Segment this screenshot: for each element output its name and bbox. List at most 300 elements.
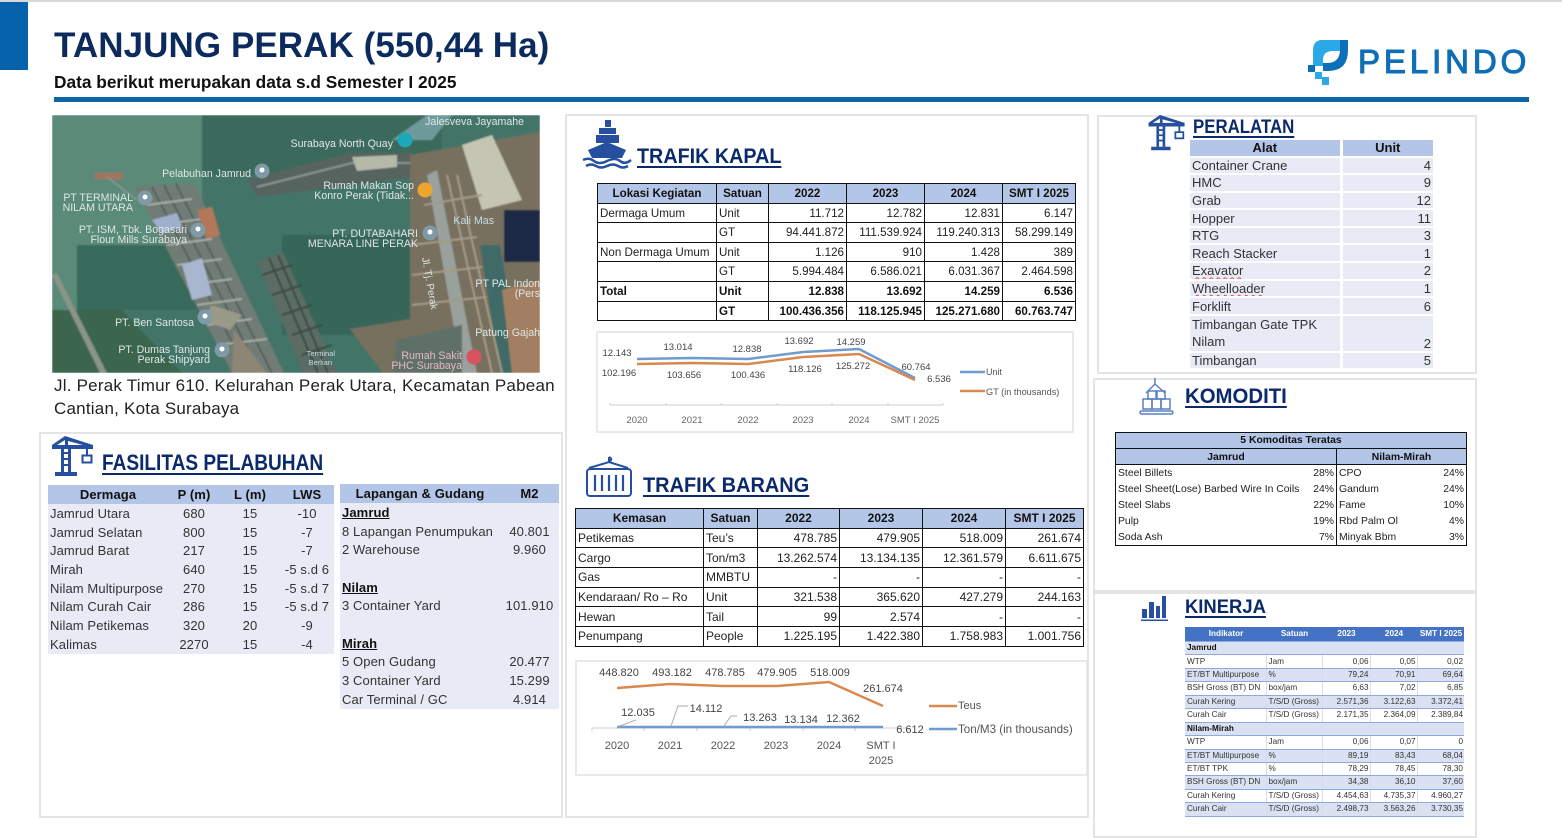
chart: trafik kapal line chart: 102.196 (602, 368, 636, 379)
table: komoditi: 24% (1443, 468, 1464, 479)
table: kinerja: % (1268, 764, 1276, 773)
chart: trafik barang line chart: 478.785 (705, 667, 745, 679)
table: trafik kapal: Lokasi Kegiatan (613, 187, 701, 200)
chart: trafik kapal line chart: SMT I 2025 (891, 415, 939, 426)
table: kinerja: 0,07 (1400, 737, 1416, 746)
table: lapangan dan gudang: Car Terminal / GC (342, 692, 447, 707)
table: lapangan dan gudang: 9.960 (513, 542, 546, 557)
table: kinerja: 2.389,84 (1431, 710, 1463, 719)
chart: trafik kapal line chart: 2021 (681, 415, 703, 426)
table: komoditi: Rbd Palm Ol (1339, 516, 1398, 527)
blue corner tab (0, 2, 28, 70)
table: komoditi: 22% (1313, 500, 1334, 511)
table: kinerja: 89,19 (1348, 751, 1368, 760)
header divider (54, 97, 1529, 102)
table: trafik barang: Satuan (710, 511, 750, 525)
table: trafik kapal: Non Dermaga Umum (600, 246, 710, 259)
table: peralatan: Container Crane (1192, 158, 1287, 173)
table: trafik kapal: 12.838 (809, 285, 844, 298)
table: lapangan dan gudang: Nilam (342, 580, 378, 595)
table: dermaga: 640 (183, 562, 205, 577)
table: peralatan: 1 (1424, 246, 1431, 261)
table: kinerja: Satuan (1281, 629, 1308, 638)
table: trafik kapal: 14.259 (965, 285, 1000, 298)
table: peralatan: 12 (1417, 193, 1431, 208)
chart: trafik barang line chart: 13.134 (784, 714, 818, 726)
table: lapangan dan gudang: 3 Container Yard (342, 598, 441, 613)
table: trafik barang: MMBTU (706, 570, 750, 584)
table: dermaga: 286 (183, 599, 205, 614)
table: kinerja: 0,06 (1353, 657, 1368, 666)
table: kinerja: T/S/D (Gross) (1268, 710, 1319, 719)
table: trafik kapal: Dermaga Umum (600, 207, 685, 220)
address: Jl. Perak Timur 610. Kelurahan Perak Utara, Kecamatan Pabean (54, 376, 555, 395)
table: dermaga: Dermaga (80, 487, 136, 502)
table: trafik barang: 12.361.579 (943, 551, 1003, 565)
table: kinerja: ET/BT TPK (1187, 764, 1228, 773)
address (54, 376, 555, 418)
map labels: Rumah Sakit (401, 350, 462, 362)
panel: fasilitas pelabuhan (39, 432, 563, 818)
table: trafik barang: 321.538 (794, 590, 837, 604)
table: dermaga: 20 (243, 618, 257, 633)
table: kinerja: T/S/D (Gross) (1268, 804, 1319, 813)
table: kinerja: 78,30 (1442, 764, 1463, 773)
table: trafik barang: 427.279 (960, 590, 1003, 604)
table: kinerja: Jamrud (1187, 643, 1217, 652)
icon: crane fasilitas (52, 436, 93, 476)
table: dermaga: Nilam Curah Cair (50, 599, 151, 614)
table: lapangan dan gudang: 101.910 (506, 598, 553, 613)
table: trafik kapal: 910 (903, 246, 922, 259)
table: dermaga: Mirah (50, 562, 83, 577)
table: trafik barang: Cargo (578, 551, 611, 565)
chart: trafik kapal line chart: 2023 (792, 415, 814, 426)
heading: komoditi: KOMODITI (1185, 385, 1287, 408)
chart: trafik kapal line chart: 12.143 (602, 348, 632, 359)
table: komoditi: 24% (1313, 484, 1334, 495)
table: komoditi: Nilam-Mirah (1372, 452, 1431, 463)
table: trafik barang: Kemasan (613, 511, 666, 525)
chart: trafik barang line chart: 261.674 (863, 683, 903, 695)
table: dermaga (48, 485, 334, 654)
table: komoditi (1115, 432, 1467, 546)
table: dermaga: 15 (243, 506, 257, 521)
heading: trafik barang: TRAFIK BARANG (643, 474, 809, 497)
panel: trafik (565, 114, 1089, 818)
chart: trafik barang line chart: 2022 (711, 740, 735, 752)
table: trafik kapal: 100.436.356 (780, 305, 844, 318)
table: kinerja: 6,85 (1447, 683, 1463, 692)
table: kinerja: Jam (1268, 737, 1284, 746)
table: trafik barang: 1.001.756 (1028, 629, 1081, 643)
map labels: PT PAL Indon (475, 278, 540, 290)
table: peralatan: Exavator (1192, 263, 1243, 278)
map labels: Kali Mas (453, 215, 494, 227)
table: trafik kapal: GT (719, 305, 735, 318)
table: trafik kapal: GT (719, 226, 735, 239)
table: kinerja: 34,38 (1348, 777, 1368, 786)
panel: komoditi (1093, 378, 1477, 592)
table: kinerja: 0,05 (1400, 657, 1416, 666)
chart: trafik kapal line chart: 13.014 (663, 342, 693, 353)
table: dermaga: 217 (183, 543, 205, 558)
table: peralatan: RTG (1192, 228, 1219, 243)
table: trafik barang: Teu’s (706, 531, 734, 545)
chart: trafik kapal line chart: 12.838 (732, 344, 762, 355)
table: lapangan dan gudang: 20.477 (509, 654, 550, 669)
table: trafik barang: 2023 (868, 511, 894, 525)
table: trafik barang: 478.785 (794, 531, 837, 545)
map labels: PT. Ben Santosa (115, 317, 194, 329)
table: komoditi: Gandum (1339, 484, 1379, 495)
table: trafik kapal: 119.240.313 (936, 226, 1000, 239)
chart: trafik kapal line chart: 2020 (626, 415, 648, 426)
panel: kinerja (1093, 592, 1477, 838)
table: dermaga: P (m) (178, 487, 210, 502)
chart: trafik barang line chart: 2025 (869, 755, 893, 767)
table: trafik kapal: 2024 (951, 187, 976, 200)
table: kinerja: 3.563,26 (1384, 804, 1416, 813)
table: trafik barang: Gas (578, 570, 600, 584)
heading: kinerja: KINERJA (1185, 597, 1266, 618)
table: trafik kapal: 2022 (795, 187, 820, 200)
table: kinerja: 83,43 (1395, 751, 1416, 760)
chart: trafik kapal line chart: 2022 (737, 415, 759, 426)
table: dermaga: Nilam Petikemas (50, 618, 149, 633)
table: lapangan dan gudang: 15.299 (509, 673, 550, 688)
table: komoditi: CPO (1339, 468, 1362, 479)
map labels: Pelabuhan Jamrud (162, 168, 251, 180)
top grey rule (0, 0, 1562, 2)
table: kinerja: BSH Gross (BT) DN (1187, 683, 1260, 692)
map labels: Jalesveva Jayamahe (425, 116, 524, 128)
table: trafik kapal: SMT I 2025 (1009, 187, 1069, 200)
table: dermaga: 15 (243, 599, 257, 614)
table: dermaga: 15 (243, 637, 257, 652)
map labels: Jl. Tj. Perak (419, 257, 439, 311)
table: peralatan (1190, 140, 1433, 368)
table: komoditi: Pulp (1118, 516, 1139, 527)
heading: peralatan: PERALATAN (1193, 117, 1294, 138)
map labels: Patung Gajah (475, 327, 540, 339)
table: trafik barang: 2.574 (890, 610, 920, 624)
table: komoditi: Steel Slabs (1118, 500, 1171, 511)
table: trafik barang: 518.009 (960, 531, 1003, 545)
table: kinerja: 0,06 (1353, 737, 1368, 746)
table: trafik kapal: 13.692 (887, 285, 922, 298)
table: trafik barang: 261.674 (1038, 531, 1081, 545)
table: peralatan: Timbangan Gate TPK (1192, 317, 1317, 332)
chart: trafik barang line chart: 493.182 (652, 667, 692, 679)
icon: crane peralatan (1148, 115, 1185, 150)
table: kinerja: 68,04 (1442, 751, 1463, 760)
table: trafik kapal: 389 (1054, 246, 1073, 259)
table: lapangan dan gudang: 4.914 (513, 692, 546, 707)
table: komoditi: Fame (1339, 500, 1366, 511)
table: trafik kapal: Total (600, 285, 627, 298)
table: peralatan: Grab (1192, 193, 1221, 208)
table: peralatan: 1 (1424, 281, 1431, 296)
table: trafik barang: - (999, 610, 1003, 624)
table: peralatan: 11 (1418, 211, 1431, 226)
table: trafik barang (575, 508, 1084, 647)
table: trafik barang: Hewan (578, 610, 615, 624)
table: peralatan: Forklift (1192, 299, 1231, 314)
table: kinerja: Curah Cair (1187, 804, 1227, 813)
chart: trafik barang line chart: 2024 (817, 740, 841, 752)
table: lapangan dan gudang: 40.801 (509, 524, 550, 539)
table: dermaga: -7 (301, 525, 313, 540)
table: kinerja: Curah Kering (1187, 791, 1235, 800)
chart: trafik barang line chart: 6.612 (896, 724, 924, 736)
table: dermaga: Jamrud Selatan (50, 525, 142, 540)
map labels: Perak Shipyard (138, 354, 210, 366)
map labels: Surabaya North Quay (291, 138, 394, 150)
table: trafik kapal: 94.441.872 (786, 226, 844, 239)
table: kinerja: 69,64 (1442, 670, 1463, 679)
chart: trafik barang line chart: SMT I (866, 740, 896, 752)
table: kinerja: 2.171,35 (1337, 710, 1368, 719)
icon: bar chart (1141, 596, 1168, 621)
table: lapangan dan gudang: 3 Container Yard (342, 673, 441, 688)
table: trafik barang: - (1077, 610, 1081, 624)
chart: trafik kapal line chart: 118.126 (788, 364, 822, 375)
table: kinerja: 78,29 (1348, 764, 1368, 773)
table: kinerja: 0 (1458, 737, 1463, 746)
chart: trafik kapal line chart: 103.656 (667, 370, 701, 381)
table: trafik kapal: 6.147 (1044, 207, 1073, 220)
chart: trafik barang line chart: 2021 (658, 740, 682, 752)
table: trafik kapal: Unit (719, 246, 740, 259)
chart: trafik barang line chart: 13.263 (743, 712, 777, 724)
map labels: Rumah Makan Sop (323, 180, 414, 192)
chart: trafik kapal line chart: 2024 (848, 415, 870, 426)
table: trafik barang: 13.134.135 (860, 551, 920, 565)
table: kinerja: Nilam-Mirah (1187, 724, 1234, 733)
table: kinerja: 4.960,27 (1431, 791, 1463, 800)
table: dermaga: L (m) (234, 487, 266, 502)
table: kinerja: 2.498,73 (1337, 804, 1368, 813)
table: trafik barang: 13.262.574 (777, 551, 837, 565)
table: dermaga: -5 s.d 7 (285, 599, 329, 614)
table: kinerja: 3.730,35 (1431, 804, 1463, 813)
table: lapangan dan gudang: 5 Open Gudang (342, 654, 436, 669)
heading: trafik kapal: TRAFIK KAPAL (637, 145, 781, 168)
table: komoditi: 5 Komoditas Teratas (1240, 435, 1342, 446)
table: trafik kapal: 118.125.945 (858, 305, 922, 318)
table: komoditi: Jamrud (1207, 452, 1245, 463)
table: trafik kapal: Unit (719, 207, 740, 220)
table: kinerja: 2.571,36 (1337, 697, 1368, 706)
chart: trafik barang line chart (575, 660, 1087, 776)
table: dermaga: 680 (183, 506, 205, 521)
table: trafik barang: - (916, 570, 920, 584)
table: peralatan: 2 (1424, 336, 1431, 351)
table: kinerja: 2024 (1385, 629, 1403, 638)
table: kinerja: T/S/D (Gross) (1268, 791, 1319, 800)
table: lapangan dan gudang: Jamrud (342, 505, 390, 520)
chart: trafik kapal line chart: 100.436 (731, 370, 765, 381)
table: kinerja: Indikator (1209, 629, 1243, 638)
chart: trafik barang line chart: Teus (958, 700, 982, 712)
icon: container (586, 456, 632, 497)
table: trafik kapal: Unit (719, 285, 742, 298)
table: lapangan dan gudang: M2 (520, 486, 539, 501)
table: dermaga: 2270 (179, 637, 209, 652)
table: dermaga: LWS (293, 487, 321, 502)
table: peralatan: Timbangan (1192, 353, 1257, 368)
table: dermaga: Jamrud Utara (50, 506, 130, 521)
map labels: PT TERMINAL (63, 192, 133, 204)
table: trafik kapal: 111.539.924 (859, 226, 922, 239)
table: dermaga: -5 s.d 6 (285, 562, 329, 577)
table: trafik kapal: Satuan (723, 187, 762, 200)
chart: trafik barang line chart: Ton/M3 (in thousands) (958, 723, 1073, 736)
table: lapangan dan gudang: 8 Lapangan Penumpukan (342, 524, 493, 539)
table: dermaga: -9 (301, 618, 313, 633)
table: peralatan: Wheelloader (1192, 281, 1265, 296)
table: trafik barang: Tail (706, 610, 724, 624)
table: komoditi: Minyak Bbm (1339, 532, 1396, 543)
chart: trafik kapal line chart (596, 331, 1074, 433)
table: komoditi: 24% (1443, 484, 1464, 495)
chart: trafik kapal line chart: 13.692 (784, 336, 814, 347)
map labels (63, 116, 540, 372)
table: trafik barang: 2024 (951, 511, 977, 525)
table: peralatan: Hopper (1192, 211, 1235, 226)
table: trafik barang: 1.758.983 (950, 629, 1003, 643)
table: lapangan dan gudang: Mirah (342, 636, 377, 651)
table: trafik barang: 1.422.380 (867, 629, 920, 643)
table: trafik kapal: 6.031.367 (948, 265, 1000, 278)
table: peralatan: 6 (1424, 299, 1431, 314)
map labels: PT. Dumas Tanjung (118, 344, 210, 356)
table: peralatan: Alat (1252, 140, 1277, 155)
map labels: MENARA LINE PERAK (308, 238, 418, 250)
table: kinerja: % (1268, 670, 1276, 679)
table: kinerja: box/jam (1268, 777, 1297, 786)
icon: Pelindo mark (1308, 40, 1348, 85)
table: trafik barang: 365.620 (877, 590, 920, 604)
map labels: PHC Surabaya (391, 360, 462, 372)
table: komoditi: Soda Ash (1118, 532, 1162, 543)
map labels: Terminal (307, 349, 335, 358)
icon: ship (582, 120, 632, 169)
chart: trafik kapal line chart: 60.764 (901, 362, 931, 373)
table: trafik barang: 1.225.195 (784, 629, 837, 643)
table: komoditi: 19% (1313, 516, 1334, 527)
table: trafik barang: 99 (824, 610, 837, 624)
table: kinerja: 3.122,63 (1384, 697, 1416, 706)
table: kinerja: % (1268, 751, 1276, 760)
table: peralatan: 4 (1424, 158, 1431, 173)
table: peralatan: Reach Stacker (1192, 246, 1277, 261)
chart: trafik barang line chart: 2023 (764, 740, 788, 752)
table: peralatan: 9 (1424, 175, 1431, 190)
map labels: Flour Mills Surabaya (90, 234, 187, 246)
table: dermaga: 800 (183, 525, 205, 540)
table: trafik kapal: 2023 (873, 187, 898, 200)
table: peralatan: 5 (1424, 353, 1431, 368)
table: kinerja: 78,45 (1395, 764, 1416, 773)
table: trafik kapal: 12.831 (965, 207, 1000, 220)
table: kinerja: T/S/D (Gross) (1268, 697, 1319, 706)
chart: trafik barang line chart: 12.362 (826, 713, 860, 725)
table: peralatan: Nilam (1192, 334, 1225, 349)
table: trafik kapal (597, 183, 1076, 321)
chart: trafik kapal line chart: 6.536 (927, 374, 951, 385)
table: kinerja: WTP (1187, 657, 1205, 666)
chart: trafik barang line chart: 479.905 (757, 667, 797, 679)
map pins (138, 132, 482, 364)
table: peralatan: 2 (1424, 263, 1431, 278)
table: kinerja: WTP (1187, 737, 1205, 746)
subtitle: Data berikut merupakan data s.d Semester I 2025 (54, 72, 456, 92)
logo wordmark: PELINDO (1358, 43, 1530, 80)
table: trafik barang: 6.611.675 (1028, 551, 1081, 565)
map labels: Berlian (309, 358, 332, 367)
chart: trafik barang line chart: 2020 (605, 740, 629, 752)
satellite map (52, 115, 540, 373)
table: dermaga: 15 (243, 562, 257, 577)
table: kinerja: Curah Cair (1187, 710, 1227, 719)
panel: peralatan (1097, 115, 1477, 374)
table: trafik kapal: GT (719, 265, 735, 278)
chart: trafik barang line chart: 448.820 (599, 667, 639, 679)
table: trafik kapal: 6.536 (1044, 285, 1073, 298)
address: Cantian, Kota Surabaya (54, 399, 239, 418)
table: kinerja: BSH Gross (BT) DN (1187, 777, 1260, 786)
chart: trafik barang line chart: 14.112 (690, 703, 722, 715)
table: trafik barang: Unit (706, 590, 727, 604)
table: trafik kapal: 60.763.747 (1015, 305, 1073, 318)
table: dermaga: 320 (183, 618, 205, 633)
logo: Pelindo (1308, 40, 1530, 85)
table: trafik kapal: 58.299.149 (1015, 226, 1073, 239)
chart: trafik kapal line chart: 125.272 (836, 361, 870, 372)
map labels: PT. DUTABAHARI (332, 228, 418, 240)
table: peralatan: HMC (1192, 175, 1222, 190)
table: dermaga: 15 (243, 581, 257, 596)
table: lapangan dan gudang (340, 484, 559, 709)
chart: trafik kapal line chart: 14.259 (836, 337, 866, 348)
table: kinerja: 37,60 (1442, 777, 1463, 786)
icon: komoditi cargo (1139, 378, 1174, 415)
table: dermaga: 15 (243, 525, 257, 540)
table: kinerja: SMT I 2025 (1420, 629, 1462, 638)
table: kinerja: 4.454,63 (1337, 791, 1368, 800)
table: lapangan dan gudang: Lapangan & Gudang (356, 486, 484, 501)
table: kinerja: ET/BT Multipurpose (1187, 670, 1259, 679)
map labels: NILAM UTARA (63, 202, 134, 214)
table: trafik kapal: 11.712 (809, 207, 844, 220)
title: TANJUNG PERAK (550,44 Ha) (54, 26, 549, 65)
table: dermaga: 15 (243, 543, 257, 558)
table: trafik barang: - (1077, 570, 1081, 584)
table: trafik barang: 244.163 (1038, 590, 1081, 604)
table: kinerja: 2023 (1337, 629, 1356, 638)
chart: trafik barang line chart: 12.035 (621, 707, 655, 719)
table: trafik barang: 2022 (785, 511, 812, 525)
table: kinerja: 6,63 (1353, 683, 1368, 692)
table: kinerja: 3.372,41 (1431, 697, 1463, 706)
table: komoditi: 7% (1319, 532, 1334, 543)
table: lapangan dan gudang: 2 Warehouse (342, 542, 420, 557)
table: komoditi: Steel Sheet(Lose) Barbed Wire In Coils (1118, 484, 1299, 495)
table: dermaga: Kalimas (50, 637, 97, 652)
table: kinerja: 7,02 (1400, 683, 1416, 692)
